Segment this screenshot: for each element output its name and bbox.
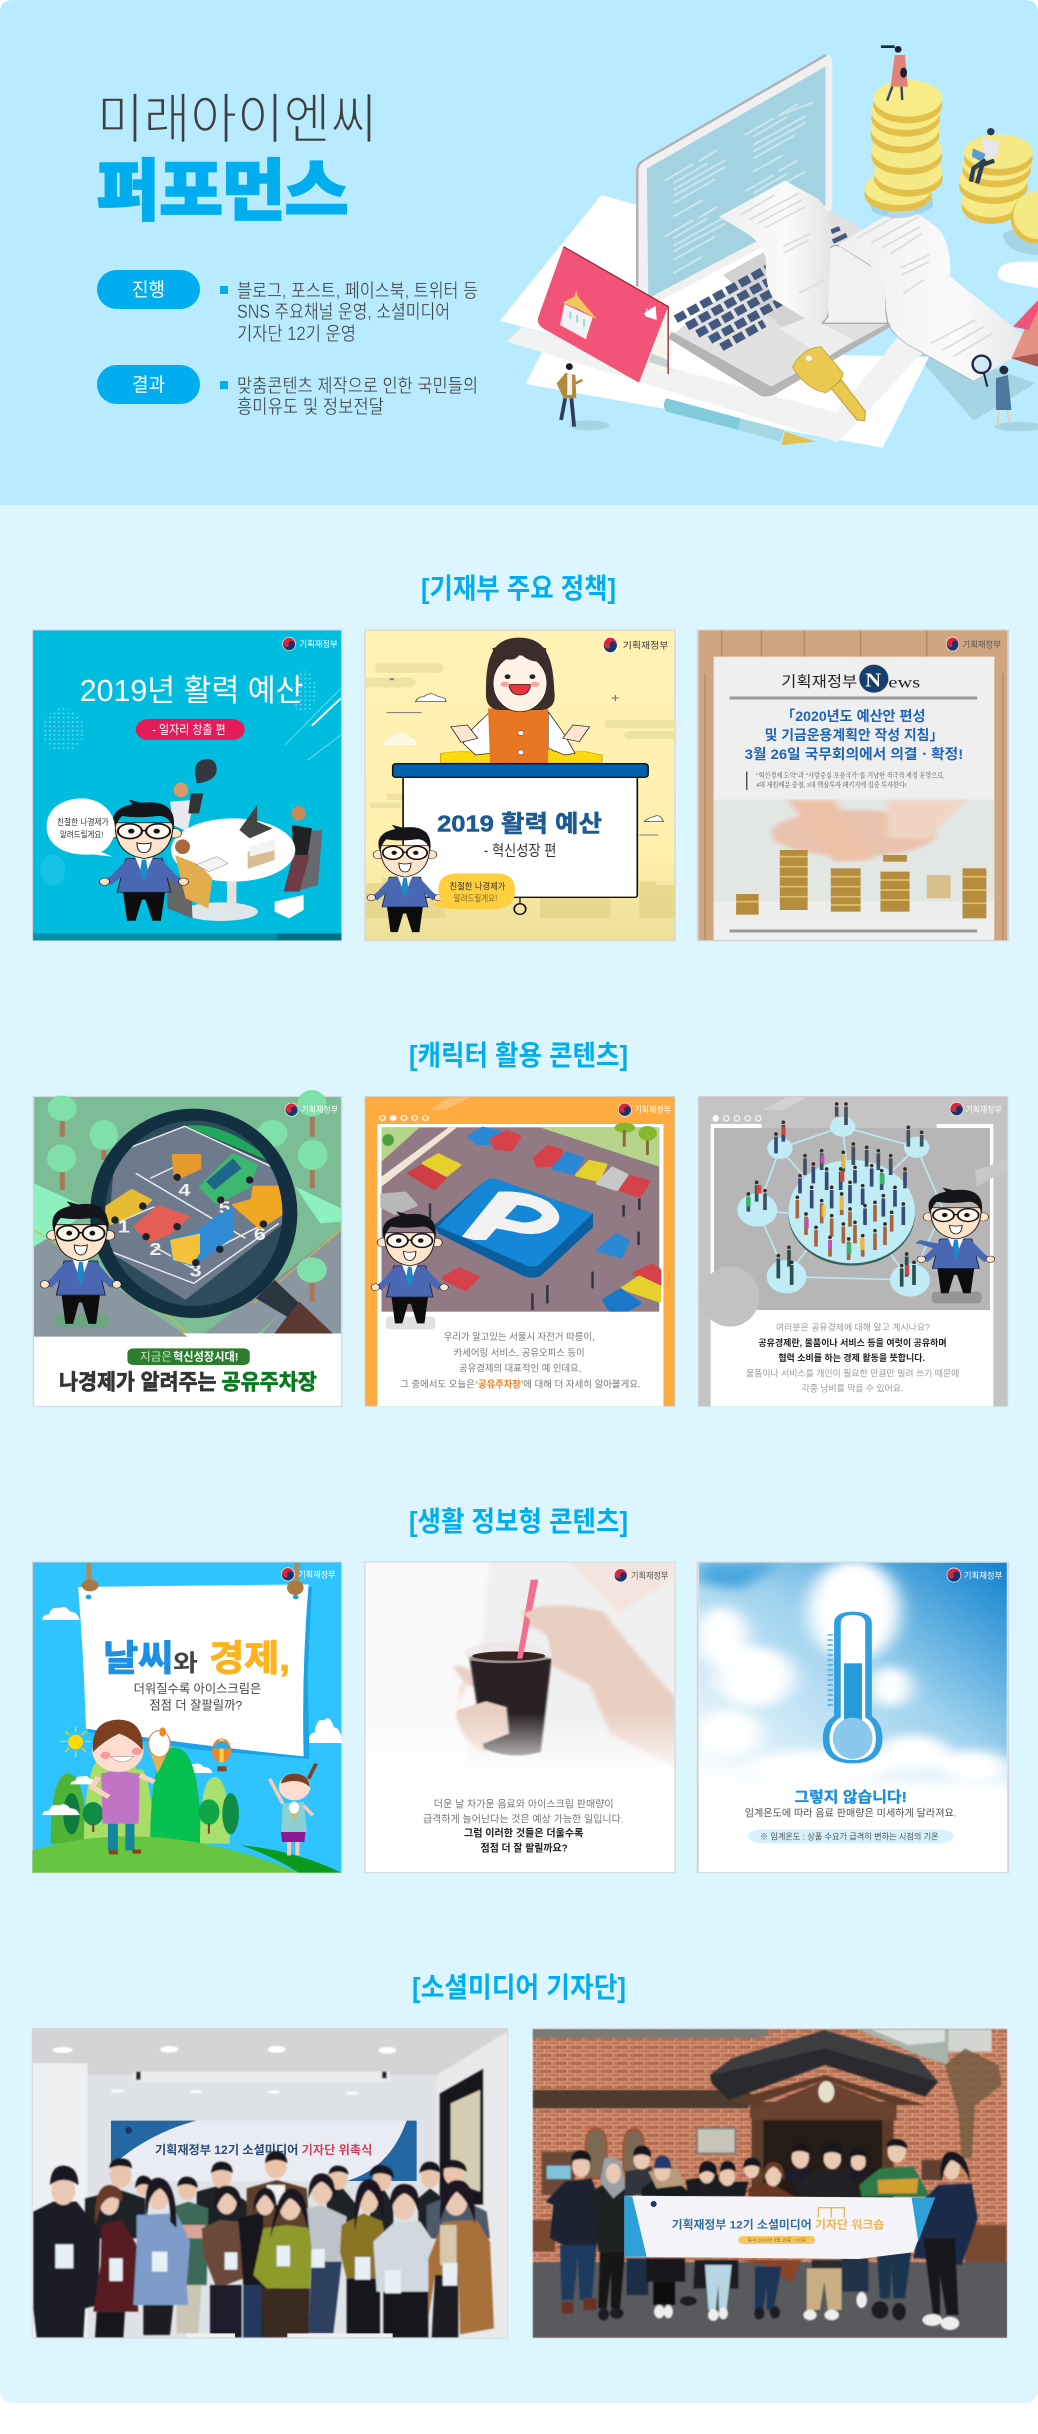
fountain pen bbox=[664, 398, 816, 445]
small girl bbox=[270, 1764, 316, 1855]
card: cold drink bbox=[365, 1557, 681, 1873]
building bbox=[533, 2030, 1007, 2338]
description text: 에 대해 더 자세히 알아볼게요. bbox=[523, 1378, 641, 1390]
magnifier: 1 bbox=[118, 1218, 130, 1237]
logo: 기획재정부 bbox=[966, 1104, 1002, 1114]
group of people bbox=[33, 2151, 494, 2338]
news summary bbox=[747, 771, 945, 790]
description text: 급격하게 늘어난다는 것은 예상 가능한 일입니다. bbox=[423, 1813, 624, 1825]
mouse and red folder bbox=[998, 262, 1038, 367]
logo bbox=[950, 1102, 1002, 1116]
small people bbox=[557, 46, 1011, 427]
front row bbox=[33, 2166, 494, 2338]
banner: 기자단 위촉식 bbox=[302, 2143, 372, 2157]
news masthead bbox=[730, 665, 977, 698]
logo: 기획재정부 bbox=[634, 1105, 671, 1114]
description text: 카세어링 서비스, 공유오피스 등이 bbox=[454, 1347, 585, 1359]
description text: ‘공유주차장’ bbox=[476, 1379, 523, 1390]
magnifier: 6 bbox=[254, 1225, 266, 1244]
big girl with ice cream bbox=[92, 1720, 170, 1854]
room background bbox=[30, 2025, 510, 2340]
magnifier: 4 bbox=[178, 1181, 191, 1200]
coins photo bbox=[714, 799, 994, 921]
people bbox=[546, 2139, 978, 2330]
news masthead: 기획재정부 bbox=[781, 673, 857, 690]
sky photo bbox=[695, 1560, 1007, 1790]
green pill: 혁신성장시대! bbox=[173, 1350, 239, 1363]
logo: 기획재정부 bbox=[964, 1571, 1002, 1580]
description text bbox=[400, 1330, 641, 1390]
heading: character content: [캐릭터 활용 콘텐츠] bbox=[409, 1040, 628, 1071]
red book bbox=[538, 247, 668, 383]
laptop bbox=[637, 55, 956, 397]
gold key bbox=[792, 347, 866, 421]
podium board: 2019 활력 예산 bbox=[437, 810, 602, 837]
speech bubble: 알려드릴게요! bbox=[60, 829, 103, 840]
crowd of people bbox=[748, 1104, 922, 1287]
news masthead: N bbox=[865, 669, 881, 691]
description text: 더운 날 차가운 음료와 아이스크림 판매량이 bbox=[434, 1798, 614, 1810]
note pill bbox=[748, 1829, 953, 1843]
panel: hero bbox=[0, 0, 1038, 505]
title: company name: 미래아이엔씨 bbox=[97, 90, 377, 150]
bullet text: result bbox=[220, 375, 478, 418]
hanging banner bbox=[78, 1563, 312, 1759]
mascot bbox=[100, 800, 188, 921]
speech bubble bbox=[47, 798, 115, 857]
card: ministry news bbox=[698, 630, 1008, 941]
hero illustration bbox=[500, 46, 1038, 448]
logo: 기획재정부 bbox=[623, 640, 669, 651]
pill subtitle bbox=[136, 719, 245, 740]
workshop banner: 기자단 워크숍 bbox=[815, 2217, 884, 2231]
workshop banner: 일시 2019년 3월 15일 ~ 16일 bbox=[748, 2237, 806, 2244]
banner subtext: 더워질수록 아이스크림은 bbox=[134, 1681, 261, 1696]
description text: 공유경제의 대표적인 예 인데요, bbox=[459, 1363, 581, 1374]
logo bbox=[614, 1568, 669, 1582]
description text: 물품이나 서비스를 개인이 필요한 만큼만 빌려 쓰기 때문에 bbox=[746, 1368, 959, 1379]
pill: progress bbox=[97, 270, 200, 309]
mascot bbox=[915, 1187, 995, 1293]
green pill: 지금은 bbox=[140, 1350, 172, 1363]
description text: 협력 소비를 하는 경제 활동을 뜻합니다. bbox=[778, 1352, 925, 1363]
pill: result: 결과 bbox=[132, 374, 165, 396]
heading: ministry policy: [기재부 주요 정책] bbox=[421, 573, 616, 604]
parking lot picture bbox=[382, 1123, 659, 1312]
description text: 각종 낭비를 막을 수 있어요. bbox=[802, 1383, 903, 1394]
title: performance: 퍼포먼스 bbox=[97, 154, 348, 228]
description text: 그럼 이러한 것들은 더울수록 bbox=[464, 1827, 584, 1839]
description text bbox=[423, 1798, 624, 1854]
banner: 기획재정부 12기 소셜미디어 bbox=[155, 2143, 298, 2157]
road and trees bbox=[34, 1090, 341, 1337]
card: thermometer sky bbox=[695, 1560, 1008, 1873]
magnifier: 5 bbox=[219, 1198, 231, 1218]
banner subtext bbox=[134, 1681, 261, 1712]
card: weather and economy bbox=[32, 1562, 343, 1873]
presenter girl bbox=[440, 638, 602, 763]
magnifier bbox=[98, 1115, 290, 1312]
green pill bbox=[127, 1348, 250, 1365]
receipt paper bbox=[719, 181, 1036, 381]
news headline bbox=[745, 708, 963, 762]
answer heading: 그렇지 않습니다! bbox=[794, 1789, 907, 1805]
podium board bbox=[393, 764, 648, 914]
news masthead: ews bbox=[888, 674, 920, 691]
pill: result bbox=[97, 365, 200, 404]
description text bbox=[746, 1322, 959, 1394]
card: shared parking explained bbox=[33, 1090, 342, 1406]
logo bbox=[281, 1567, 336, 1581]
description text: 그 중에서도 오늘은 bbox=[400, 1379, 475, 1390]
pagination dots bbox=[713, 1116, 761, 1121]
mascot bbox=[40, 1201, 121, 1324]
logo bbox=[285, 1103, 338, 1117]
mascot bbox=[367, 825, 443, 932]
yellow speech bubble: 알려드릴게요! bbox=[454, 893, 497, 904]
card: 2019 budget jobs bbox=[32, 630, 342, 941]
description text: 우리가 알고있는 서울시 자전거 따릉이, bbox=[444, 1330, 595, 1343]
mascot shadow bbox=[55, 1314, 109, 1328]
logo bbox=[946, 637, 1001, 651]
workshop banner bbox=[624, 2196, 935, 2259]
mascot shadow bbox=[386, 1317, 435, 1329]
banner heading bbox=[103, 1638, 290, 1678]
magnifier: 3 bbox=[190, 1262, 202, 1281]
photo: workshop group bbox=[533, 2029, 1007, 2338]
photo: appointment ceremony bbox=[30, 2025, 510, 2340]
yellow speech bubble bbox=[432, 873, 515, 909]
bullet text: result: 맞춤콘텐츠 제작으로 인한 국민들의 bbox=[237, 375, 478, 397]
bullet text: progress: 블로그, 포스트, 페이스북, 트위터 등 bbox=[237, 280, 478, 302]
pill: progress: 진행 bbox=[132, 279, 165, 301]
mascot shadow bbox=[932, 1292, 982, 1303]
bottom rule bbox=[730, 926, 977, 935]
logo: 기획재정부 bbox=[302, 1105, 338, 1114]
heading: social media reporters: [소셜미디어 기자단] bbox=[412, 1972, 626, 2003]
thermometer bbox=[826, 1613, 879, 1762]
hills and trees bbox=[32, 1748, 341, 1873]
big caption: 나경제가 알려주는 bbox=[59, 1371, 217, 1395]
pill subtitle: - 일자리 창출 편 bbox=[152, 722, 226, 738]
card: sharing economy network bbox=[698, 1096, 1008, 1406]
magnifier handle bbox=[256, 1280, 333, 1333]
description text: 여러분은 공유경제에 대해 알고 계시나요? bbox=[776, 1322, 930, 1333]
shadows and paper sheets bbox=[500, 195, 1038, 448]
logo bbox=[947, 1568, 1002, 1582]
yellow speech bubble: 친절한 나경제가 bbox=[450, 880, 506, 892]
banner bbox=[111, 2121, 417, 2181]
meeting table scene bbox=[167, 759, 322, 921]
network diagram bbox=[737, 1104, 943, 1297]
bullet text: result: 흥미유도 및 정보전달 bbox=[237, 396, 384, 418]
card title: 2019년 활력 예산 bbox=[80, 674, 304, 708]
bullet text: progress: 기자단 12기 운영 bbox=[237, 323, 356, 345]
clouds bbox=[42, 1607, 343, 1773]
workshop banner: 기획재정부 12기 소셜미디어 bbox=[672, 2217, 812, 2231]
pagination dots bbox=[379, 1116, 428, 1120]
bullet text: progress: SNS 주요채널 운영, 소셜미디어 bbox=[237, 301, 450, 323]
sun and balloon bbox=[60, 1726, 231, 1771]
photo hand and cup bbox=[450, 1562, 674, 1766]
big caption: 공유주차장 bbox=[222, 1371, 317, 1395]
logo: 기획재정부 bbox=[631, 1571, 669, 1580]
heading: lifestyle content: [생활 정보형 콘텐츠] bbox=[409, 1506, 628, 1537]
magnifier: 2 bbox=[149, 1240, 162, 1259]
bullet text: progress bbox=[220, 280, 478, 345]
card: 2019 budget innovation bbox=[365, 630, 675, 941]
banner heading: 와 bbox=[173, 1650, 198, 1676]
mascot bbox=[371, 1211, 448, 1323]
logo: 기획재정부 bbox=[299, 639, 338, 649]
description text: 점점 더 잘 팔릴까요? bbox=[481, 1842, 568, 1854]
banner subtext: 점점 더 잘팔릴까? bbox=[149, 1698, 242, 1712]
banner heading: 날씨 bbox=[103, 1638, 173, 1678]
logo: 기획재정부 bbox=[298, 1570, 336, 1579]
podium board: - 혁신성장 편 bbox=[484, 842, 556, 859]
banner heading: 경제, bbox=[209, 1638, 290, 1678]
logo bbox=[603, 637, 669, 653]
card: parking lot text bbox=[365, 1096, 675, 1406]
logo bbox=[618, 1103, 671, 1117]
description text: 공유경제란, 물품이나 서비스 등을 여럿이 공유하며 bbox=[758, 1337, 947, 1348]
coin stacks bbox=[864, 80, 1038, 243]
speech bubble: 친절한 나경제가 bbox=[57, 816, 109, 828]
logo bbox=[282, 637, 338, 651]
